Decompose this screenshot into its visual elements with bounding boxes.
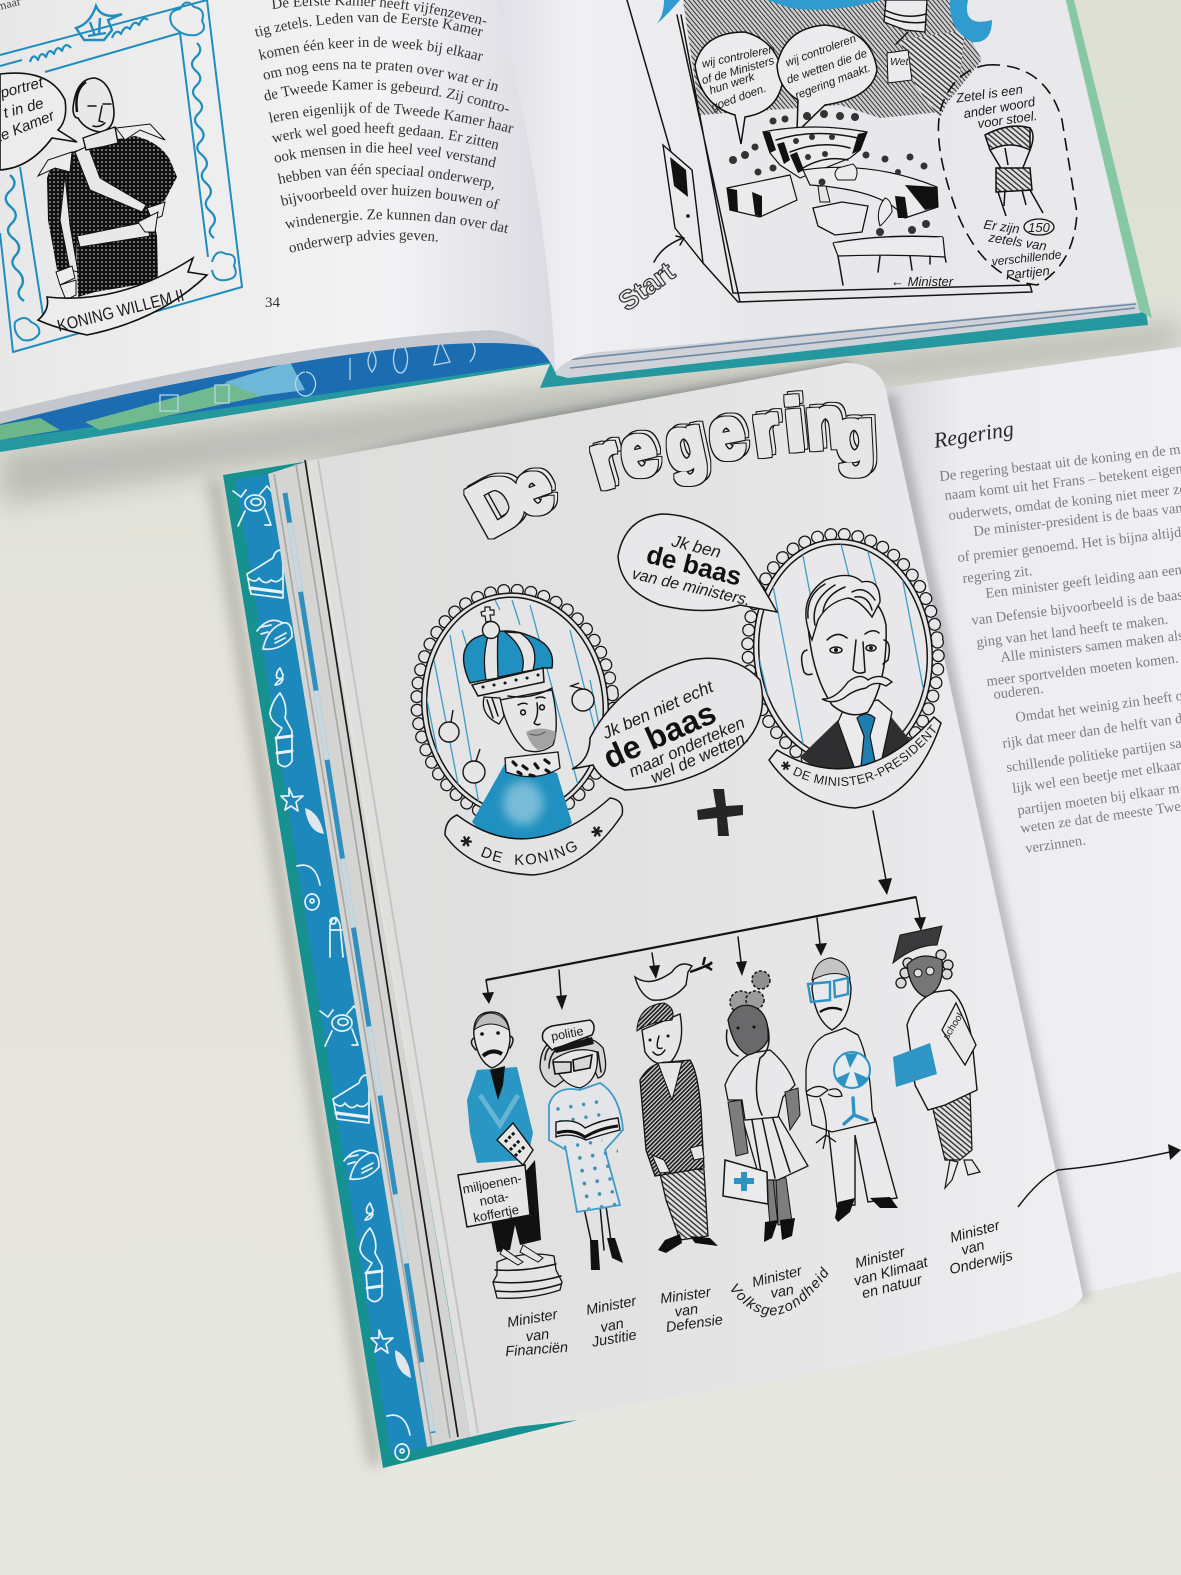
speech bubble: niet echt de baas: maar onderteken (626, 714, 748, 781)
right page (885, 347, 1181, 1295)
right page text block: ging van het land heeft te maken. (976, 612, 1169, 651)
label: volksgezondheid: Volksgezondheid (731, 1266, 828, 1318)
right page text block: meer sportvelden moeten komen. (986, 651, 1179, 690)
shoes (835, 1197, 898, 1222)
minister labels (505, 1218, 1014, 1360)
police cap: politie (550, 1024, 585, 1044)
book cover (223, 462, 578, 1468)
shadow of upper book on table (0, 322, 1181, 505)
face features (88, 104, 111, 127)
dashed callout: zetel: Er zijn (983, 217, 1021, 236)
briefcase miljoenennota: miljoenen- (461, 1170, 523, 1197)
label: klimaat (852, 1244, 931, 1302)
dashed callout: zetel: verschillende (991, 247, 1062, 269)
shoes (658, 1234, 718, 1253)
eyes (482, 1033, 498, 1034)
crayon highlight on robe (503, 781, 543, 825)
title: De regering: e (701, 389, 751, 477)
first aid case (723, 1160, 768, 1204)
banner KONING WILLEM II: KONING WILLEM II (55, 286, 186, 336)
right page text block: Omdat het weinig zin heeft o (1014, 688, 1181, 726)
minister: defensie (635, 957, 718, 1253)
title: De regering: g (657, 399, 712, 488)
briefcase miljoenennota: koffertje (472, 1202, 520, 1225)
right page text block: rijk dat meer dan de helft van d (1001, 711, 1181, 752)
shadow beside lower book cover (214, 480, 375, 1465)
black trousers (490, 1160, 541, 1252)
cardigan texture (480, 1095, 518, 1125)
speech bubble: de baas van de ministers (618, 514, 777, 612)
speech bubble ministers: hun werk (708, 71, 757, 97)
lower right block (803, 167, 938, 218)
banner De Koning: ✱ DE KONING ✱ (460, 826, 602, 865)
statue stack (493, 1254, 562, 1298)
speech bubble: de baas van de ministers: de baas (644, 539, 745, 592)
minister: volksgezondheid (723, 971, 808, 1242)
right page text block: partijen moeten bij elkaar m (1016, 780, 1181, 819)
plus sign (697, 789, 743, 836)
lantern with arrow (884, 0, 927, 44)
speech bubble wetten: wij controleren (784, 33, 858, 70)
text block: Eerste Kamer: onderwerp advies geven. (290, 230, 438, 252)
org chart line with arrows (482, 897, 926, 1010)
speech bubble: de baas van de ministers: Jk ben (669, 531, 723, 562)
title: De regering: D (454, 454, 541, 553)
title: De regering (454, 380, 876, 553)
ministers' table (833, 220, 946, 285)
door (663, 145, 703, 263)
blue book (893, 1043, 937, 1087)
drawing: parliament room (613, 0, 1077, 317)
head (474, 1012, 510, 1068)
label: onderwijs (948, 1218, 1014, 1278)
label: volksgezondheid: van (769, 1282, 795, 1302)
dark hatch patch (900, 30, 965, 118)
school book: school (941, 1011, 966, 1042)
dress (549, 1083, 623, 1212)
speech bubble portret (0, 73, 77, 170)
beard (526, 728, 556, 750)
right page text block: weten ze dat de meeste Twe (1019, 799, 1181, 837)
hatched back wall (683, 0, 982, 118)
note Wet (887, 50, 912, 83)
trousers (932, 1090, 972, 1160)
blue glasses (808, 978, 848, 1002)
dashed callout: zetel: ander woord (962, 94, 1037, 121)
right page text block (939, 440, 1181, 857)
title: De regering: r (747, 387, 784, 472)
speech bubble ministers (695, 32, 783, 144)
school book (941, 1003, 976, 1065)
speech bubble portret: t in de (2, 95, 46, 122)
speech bubble: de baas van de ministers: van de ministers. (630, 566, 752, 609)
text block: Eerste Kamer: werk wel goed heeft gedaan. Er zitten (272, 122, 498, 150)
head (812, 958, 851, 1030)
right page text block: verzinnen. (1024, 833, 1087, 857)
hands (60, 212, 158, 300)
portrait: de minister-president (741, 528, 945, 809)
text block: Eerste Kamer: de Tweede Kamer is gebeurd. Zij contro- (264, 80, 509, 112)
banner De Koning (444, 797, 624, 876)
right page text block: Alle ministers samen maken als (1000, 628, 1181, 666)
face and glasses (553, 1050, 597, 1088)
banner De Minister-President (768, 716, 942, 809)
speech bubble: niet echt de baas (572, 658, 762, 790)
hair bun (730, 971, 770, 1013)
back rows (763, 127, 867, 178)
title: De regering: i (780, 382, 809, 467)
briefcase miljoenennota: nota- (478, 1188, 510, 1209)
text block: Eerste Kamer: ook mensen in die heel veel verstand (274, 142, 496, 168)
portrait: de koning (410, 584, 624, 876)
title: De regering: n (802, 380, 848, 466)
scalloped oval frame (406, 580, 624, 830)
speech bubble wetten: de wetten die de (785, 48, 869, 87)
book (556, 1118, 620, 1140)
label: justitie: Minister (585, 1293, 639, 1319)
dashed callout: zetel: 150 (1028, 220, 1051, 235)
head (73, 78, 114, 132)
blue wallpaper stripes (426, 600, 599, 802)
speech bubble ministers: goed doen. (710, 83, 768, 114)
shirt (806, 1028, 875, 1132)
speaker and podium (813, 178, 868, 235)
blue drapery (657, 0, 992, 42)
collar and shirt (838, 700, 892, 778)
right page text block: schillende politieke partijen sa (1005, 735, 1181, 776)
windmill globe (834, 1052, 870, 1124)
note Wet: Wet (890, 56, 910, 68)
heels (764, 1218, 795, 1242)
label: klimaat: en natuur (860, 1272, 925, 1302)
blue cardigan (467, 1067, 533, 1163)
speech bubble wetten: regering maakt. (793, 62, 872, 102)
blue endpaper with pattern (0, 335, 553, 440)
speech bubble: niet echt de baas: Jk ben niet echt (599, 677, 717, 743)
minister: justitie (540, 1020, 623, 1270)
left page (0, 0, 555, 412)
label: klimaat: van Klimaat (852, 1254, 931, 1290)
dashed callout: zetel: Zetel is een (954, 81, 1024, 106)
label: defensie: Minister (659, 1284, 713, 1307)
label: onderwijs: Onderwijs (948, 1248, 1014, 1278)
crown (464, 607, 553, 696)
dashed callout: zetel: voor stoel. (977, 108, 1038, 131)
epaulettes and cuffs (38, 124, 165, 285)
legs and boots (584, 1206, 612, 1250)
right page text block: regering zit. (962, 563, 1033, 587)
label: defensie: van (674, 1301, 699, 1321)
face features (827, 631, 879, 673)
text block: Eerste Kamer: hebben van één speciaal onderwerp, (277, 164, 494, 190)
label: klimaat: Minister (853, 1244, 908, 1272)
speech bubble ministers: of de Ministers (701, 55, 776, 87)
label: financien: Financiën (505, 1340, 569, 1360)
facial features (518, 697, 545, 735)
hair (483, 697, 504, 724)
label: defensie (659, 1284, 724, 1336)
room walls (627, 0, 1032, 302)
trousers (828, 1118, 897, 1207)
legs (766, 1178, 792, 1225)
mortarboard hat (893, 926, 942, 963)
blue ornamental frame (0, 0, 242, 352)
right page block (553, 300, 1140, 378)
start arrow (654, 236, 684, 262)
chair (985, 126, 1043, 216)
head (642, 1014, 682, 1064)
face (500, 690, 556, 752)
minister: onderwijs (893, 926, 980, 1188)
speech bubble ministers: wij controleren (701, 43, 776, 71)
lower open book (223, 347, 1181, 1468)
banner De Minister-President: ✱ DE MINISTER-PRESIDENT (781, 724, 936, 786)
briefcase miljoenennota (458, 1165, 530, 1227)
lower left block (727, 175, 797, 217)
figure Willem (0, 73, 207, 336)
right page (497, 0, 1137, 372)
dark shadow above lower book (300, 362, 850, 462)
sash and belt (60, 146, 150, 272)
scalloped oval frame (736, 525, 950, 779)
dashed callout: zetel (938, 65, 1077, 285)
arms (728, 1088, 800, 1156)
ermine collar (505, 752, 560, 777)
suit (800, 713, 922, 777)
label: defensie: Defensie (665, 1312, 724, 1336)
right page text block: ouderen. (993, 681, 1044, 703)
parliament benches (727, 110, 938, 226)
moustache (822, 676, 892, 702)
hairline (76, 82, 86, 112)
hair (806, 575, 880, 640)
label: onderwijs: Minister (948, 1218, 1003, 1246)
speech bubble: niet echt de baas: wel de wetten. (648, 728, 752, 787)
upper open book (0, 0, 1152, 452)
feet (500, 1245, 543, 1265)
face features (650, 1036, 668, 1040)
oranges (439, 683, 594, 783)
banner KONING WILLEM II (38, 258, 207, 336)
main page (308, 363, 1083, 1437)
text block: Eerste Kamer: windenergie. Ze kunnen dan over dat (284, 208, 508, 234)
text block: Eerste Kamer: tig zetels. Leden van de Eerste Kamer (254, 12, 484, 38)
label: volksgezondheid: Minister (750, 1263, 805, 1291)
dashed callout: zetel: Partijen. (1005, 263, 1054, 282)
text block: Eerste Kamer: komen één keer in de week bij elkaar (258, 36, 484, 61)
ear (802, 640, 889, 675)
hair (540, 1036, 606, 1087)
curly wig (896, 950, 953, 988)
label: justitie (585, 1293, 639, 1351)
label: financien: Minister (506, 1307, 560, 1331)
uniform (47, 136, 177, 297)
moustache (820, 1008, 842, 1012)
label: justitie: Justitie (590, 1327, 638, 1351)
speech bubble wetten (777, 25, 877, 132)
shirt opening (658, 1062, 682, 1100)
minister: financien (458, 1012, 562, 1298)
head (907, 956, 942, 997)
police cap (542, 1020, 594, 1053)
title: De regering: r (579, 415, 630, 506)
trousers (658, 1165, 708, 1240)
page edge strip (318, 460, 478, 1433)
shirt and tie (490, 1066, 505, 1100)
small speech bubbles (835, 164, 892, 226)
blue wallpaper stripes (759, 544, 924, 745)
crown on frame (76, 6, 122, 40)
dove of peace (635, 957, 712, 1000)
beret (637, 1003, 673, 1031)
spine icons (233, 486, 410, 1460)
label: financien: van (525, 1327, 550, 1345)
text block: Eerste Kamer: om nog eens na te praten over wat er in (264, 60, 498, 92)
arrow from minister-president to ministers (873, 811, 892, 895)
coat (907, 990, 977, 1110)
text block: Eerste Kamer (254, 0, 514, 252)
jacket (640, 1060, 704, 1176)
right page heading: Regering: Regering (931, 416, 1015, 453)
tie (857, 714, 878, 777)
green cover edge (1066, 0, 1152, 318)
page number: 34 (265, 295, 280, 311)
page gutter shadow (888, 395, 1082, 1300)
left page block (0, 325, 556, 424)
title: De regering: e (502, 443, 563, 533)
upper book cover (0, 312, 1148, 452)
text block: Eerste Kamer: bijvoorbeeld over huizen bouwen of (280, 184, 500, 210)
robe (472, 760, 572, 847)
speech bubble portret: portret (0, 74, 46, 102)
minister: klimaat en natuur (806, 958, 898, 1222)
speech bubble: niet echt de baas: de baas (598, 694, 721, 776)
label: financien (505, 1307, 569, 1360)
right page text block: lijk wel een beetje met elkaar (1011, 757, 1181, 797)
high collar (83, 127, 118, 150)
hair (474, 1013, 509, 1030)
title: De regering: g (833, 392, 876, 477)
hollow word Start: Start (613, 256, 680, 317)
label: onderwijs: van (960, 1237, 986, 1259)
text block: Eerste Kamer: leren eigenlijk of de Tweede Kamer haar (268, 102, 514, 133)
shoes (945, 1160, 980, 1188)
skirt (742, 1112, 808, 1180)
title: De regering: e (611, 406, 665, 495)
minister label: ← Minister (891, 274, 954, 289)
head (728, 1005, 768, 1055)
blue patterned edge strip (233, 474, 427, 1460)
stethoscope (726, 1028, 769, 1115)
blouse (725, 1050, 795, 1120)
ears (471, 1036, 513, 1050)
page stack edge (268, 460, 476, 1447)
wavy arrow to next page (1018, 1144, 1181, 1207)
dashed callout: zetel: zetels van (987, 229, 1048, 254)
label: justitie: van (599, 1316, 625, 1336)
face (808, 588, 886, 715)
hands (652, 1145, 704, 1173)
white leaf marks on spine (305, 808, 411, 1378)
calculator (497, 1123, 533, 1165)
portrait: koning Willem II in blue frame (0, 0, 242, 352)
hair lines (545, 1044, 601, 1072)
moustache (483, 1051, 502, 1056)
members of parliament (729, 110, 928, 176)
plant (806, 1086, 842, 1149)
